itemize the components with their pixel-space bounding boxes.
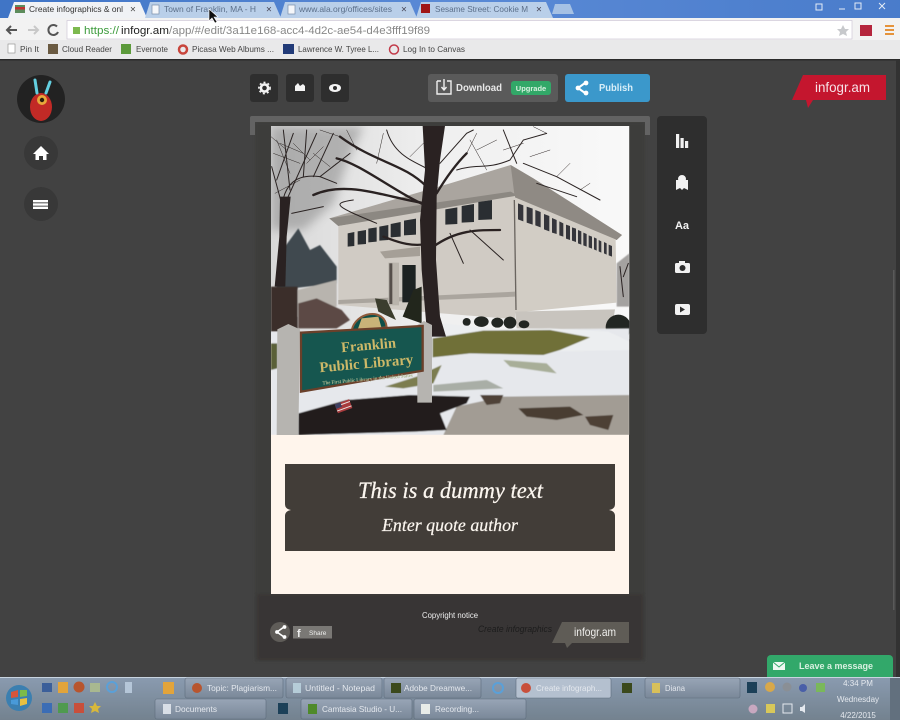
bookmarks bar: Lawrence W. Tyree L...	[298, 44, 379, 54]
taskbar buttons row two: Documents	[175, 704, 217, 714]
browser tabs: Town of Franklin, MA - H	[164, 4, 256, 14]
infographic page	[271, 126, 631, 594]
lawn	[433, 330, 590, 357]
camera icon	[675, 261, 690, 273]
canvas frame	[250, 116, 650, 661]
top editor toolbar	[250, 74, 650, 102]
bookmarks bar: Picasa Web Albums ...	[192, 44, 274, 54]
download button	[428, 74, 558, 102]
system tray icons	[747, 682, 825, 714]
gravel	[443, 395, 629, 435]
home button	[24, 136, 58, 170]
upgrade badge: Upgrade	[516, 84, 546, 93]
bookmarks bar: Cloud Reader	[62, 44, 112, 54]
windows taskbar	[0, 677, 900, 720]
infogr.am footer badge	[552, 622, 629, 648]
library sign	[277, 314, 432, 435]
sign lettering: Public Library	[319, 352, 414, 376]
photo background scenery	[271, 228, 629, 332]
taskbar buttons row two	[155, 699, 526, 719]
entrance	[380, 247, 420, 305]
library building	[329, 165, 631, 340]
copyright notice: Copyright notice	[422, 610, 478, 620]
base	[515, 309, 615, 331]
roof	[329, 165, 622, 240]
browser tabs: ×	[266, 4, 272, 16]
clock	[837, 679, 879, 720]
mascot logo	[17, 75, 65, 123]
american flag	[335, 399, 352, 413]
sign lettering: Franklin	[340, 336, 397, 356]
taskbar buttons row one: Create infograph...	[536, 683, 602, 693]
clock: 4:34 PM	[843, 679, 873, 688]
infogr.am brand logo	[792, 75, 886, 108]
address toolbar	[0, 18, 900, 40]
address bar: /app/#/edit/3a11e168-acc4-4d2c-ae54-d4e3fff19f89	[169, 25, 430, 37]
clock: 4/22/2015	[840, 711, 876, 720]
mulch	[298, 395, 470, 435]
leave a message chat button: Leave a message	[799, 661, 873, 671]
right windows	[518, 203, 612, 257]
browser chrome	[0, 0, 900, 60]
left windows	[348, 200, 492, 247]
ground	[271, 323, 629, 435]
share widget	[270, 622, 332, 642]
taskbar buttons row two: Camtasia Studio - U...	[322, 704, 402, 714]
browser tabs: ×	[130, 4, 136, 16]
sign posts	[277, 321, 432, 435]
browser tabs: Sesame Street: Cookie M	[435, 4, 528, 14]
quote banner	[285, 464, 615, 551]
browser tabs: www.ala.org/offices/sites	[298, 4, 392, 14]
video icon	[675, 304, 690, 315]
text icon: Aa	[675, 220, 690, 232]
taskbar buttons row two: Recording...	[435, 704, 479, 714]
browser tabs: ×	[401, 4, 407, 16]
browser tabs: ×	[536, 4, 542, 16]
taskbar buttons row one: Diana	[665, 683, 685, 693]
navigation buttons	[7, 25, 58, 35]
address bar: https://	[84, 25, 120, 37]
settings button	[250, 74, 278, 102]
create infographics link: Create infographics	[478, 624, 552, 635]
right wall	[515, 197, 617, 313]
quote text: This is a dummy text	[358, 478, 544, 503]
share widget: f	[297, 628, 301, 640]
mouse cursor	[209, 9, 218, 23]
bookmarks bar: Evernote	[136, 44, 168, 54]
quick launch icons	[42, 682, 288, 714]
left wall	[338, 196, 515, 319]
quote author: Enter quote author	[381, 515, 519, 535]
sign board	[301, 326, 423, 392]
sign lettering: The First Public Library in the United States	[322, 373, 413, 387]
taskbar buttons row one: Adobe Dreamwe...	[404, 683, 472, 693]
download button: Download	[456, 82, 502, 94]
taskbar buttons row one: Untitled - Notepad	[305, 683, 375, 693]
browser tabs	[8, 2, 574, 18]
leave a message chat button	[767, 655, 893, 677]
start button	[6, 685, 32, 711]
menu button	[24, 187, 58, 221]
trees	[271, 126, 628, 337]
address bar	[67, 20, 852, 39]
map icon	[676, 175, 688, 190]
browser tabs: Create infographics & onl	[29, 4, 123, 14]
preview button	[321, 74, 349, 102]
star and extension icons	[837, 25, 894, 36]
right scrollbar strip	[893, 60, 900, 680]
shrubs	[462, 314, 630, 334]
clock: Wednesday	[837, 695, 879, 704]
bookmarks bar: Pin It	[20, 44, 40, 54]
share widget: Share	[309, 630, 327, 637]
address bar: infogr.am	[121, 25, 169, 37]
chart icon	[676, 134, 688, 148]
publish button: Publish	[599, 82, 633, 94]
infogr.am brand logo: infogr.am	[815, 79, 870, 95]
bookmarks bar: Log In to Canvas	[403, 44, 465, 54]
infogr.am footer badge: infogr.am	[574, 625, 616, 639]
taskbar buttons row one: Topic: Plagiarism...	[207, 683, 277, 693]
left sidebar	[17, 75, 65, 221]
sky	[271, 126, 629, 339]
publish button	[565, 74, 650, 102]
bookmarks bar	[0, 40, 900, 60]
right insert toolbar	[657, 116, 707, 334]
taskbar buttons row one	[185, 678, 740, 698]
photo: Franklin Public Library	[271, 126, 631, 435]
upper left tree crown haze	[271, 126, 363, 230]
sign crest	[352, 314, 387, 331]
background button	[286, 74, 314, 102]
window controls	[816, 3, 885, 10]
sign lettering	[319, 338, 413, 385]
